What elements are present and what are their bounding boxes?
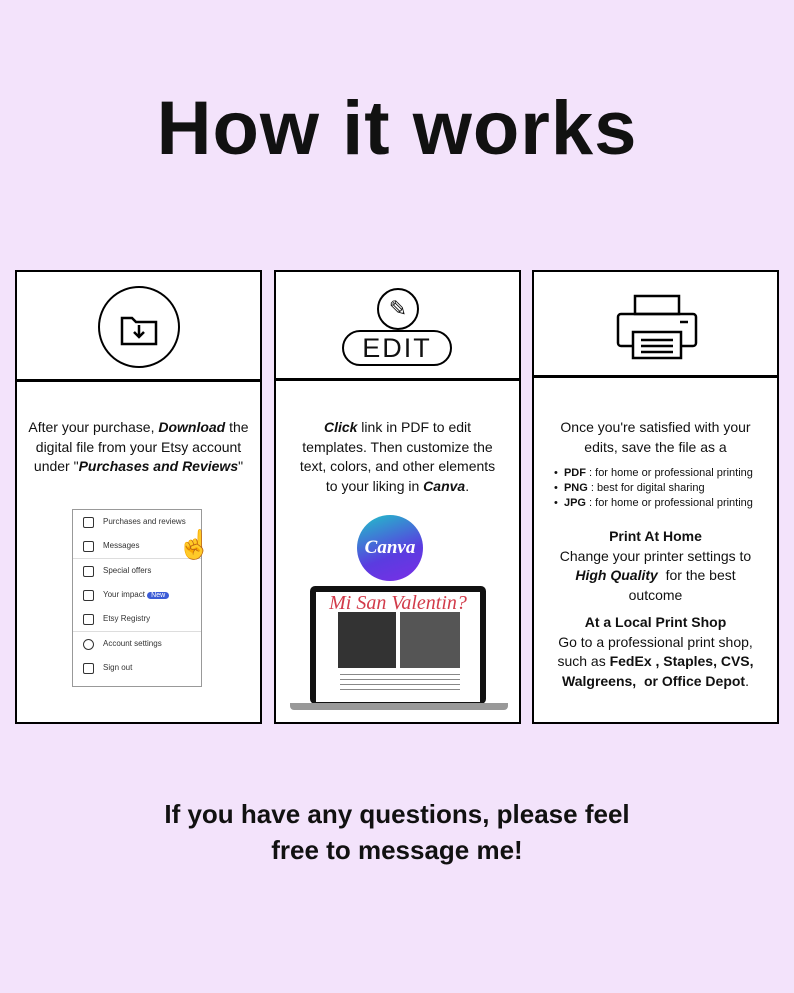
footer message: free to message me!: [271, 835, 523, 865]
icon: EDIT pencil: ✎: [389, 296, 407, 321]
etsy menu screenshot: Purchases and reviews: [103, 517, 186, 526]
etsy menu screenshot: Messages: [103, 541, 139, 550]
icon: EDIT pencil: EDIT: [362, 333, 432, 363]
text: save instructions: [560, 419, 751, 454]
text: print shop: Walgreens, or Office Depot.: [562, 672, 749, 688]
text: save instructions: Once you're satisfied with your: [560, 419, 751, 435]
text: download instructions: digital file from your Etsy account: [36, 438, 241, 454]
icon: canva logo: [357, 515, 423, 581]
title: How it works: [157, 86, 637, 171]
text: print shop: such as FedEx , Staples, CVS,: [557, 653, 754, 669]
text: print shop: [557, 614, 754, 689]
etsy menu screenshot: [72, 509, 202, 687]
laptop mockup: Mi San Valentin?: [329, 592, 467, 614]
text: download instructions: under "Purchases and Reviews": [34, 458, 243, 474]
text: edit instructions: Click link in PDF to edit: [324, 419, 471, 435]
icon: pointing hand: ☝: [177, 529, 212, 560]
laptop mockup: [290, 586, 508, 710]
text: save instructions: edits, save the file as a: [584, 438, 727, 454]
text: edit instructions: templates. Then customize the: [302, 438, 493, 454]
icon: EDIT pencil: [342, 288, 452, 366]
panel: print: [532, 270, 779, 724]
text: edit instructions: text, colors, and other elements: [300, 458, 495, 474]
text: edit instructions: [300, 419, 495, 494]
list: file formats: • PDF : for home or professional printing: [554, 467, 753, 479]
etsy menu screenshot: Etsy Registry: [103, 614, 150, 623]
footer message: If you have any questions, please feel: [164, 799, 630, 829]
etsy menu screenshot: Special offers: [103, 566, 151, 575]
text: print shop: At a Local Print Shop: [585, 614, 726, 630]
etsy menu screenshot: Account settings: [103, 639, 162, 648]
text: print at home: outcome: [629, 586, 682, 602]
etsy menu screenshot: Sign out: [103, 663, 132, 672]
text: download instructions: [28, 419, 249, 474]
list: file formats: • PNG : best for digital sharing: [554, 482, 705, 494]
etsy menu screenshot: Your impact New: [103, 590, 165, 599]
icon: printer: [616, 294, 698, 360]
panel: edit: [274, 270, 521, 724]
list: file formats: [554, 467, 753, 509]
text: print at home: Change your printer settings to: [560, 548, 751, 564]
text: print shop: Go to a professional print shop,: [558, 634, 753, 650]
text: print at home: [560, 528, 751, 602]
footer message: [164, 799, 630, 865]
text: edit instructions: to your liking in Canva.: [326, 478, 469, 494]
panel: download: [15, 270, 262, 724]
text: print at home: Print At Home: [609, 528, 702, 544]
icon: canva logo: Canva: [365, 537, 415, 558]
text: download instructions: After your purchase, Download the: [28, 419, 249, 435]
icon: download folder: [98, 286, 180, 368]
list: file formats: • JPG : for home or professional printing: [554, 497, 753, 509]
text: print at home: High Quality for the best: [575, 567, 736, 583]
